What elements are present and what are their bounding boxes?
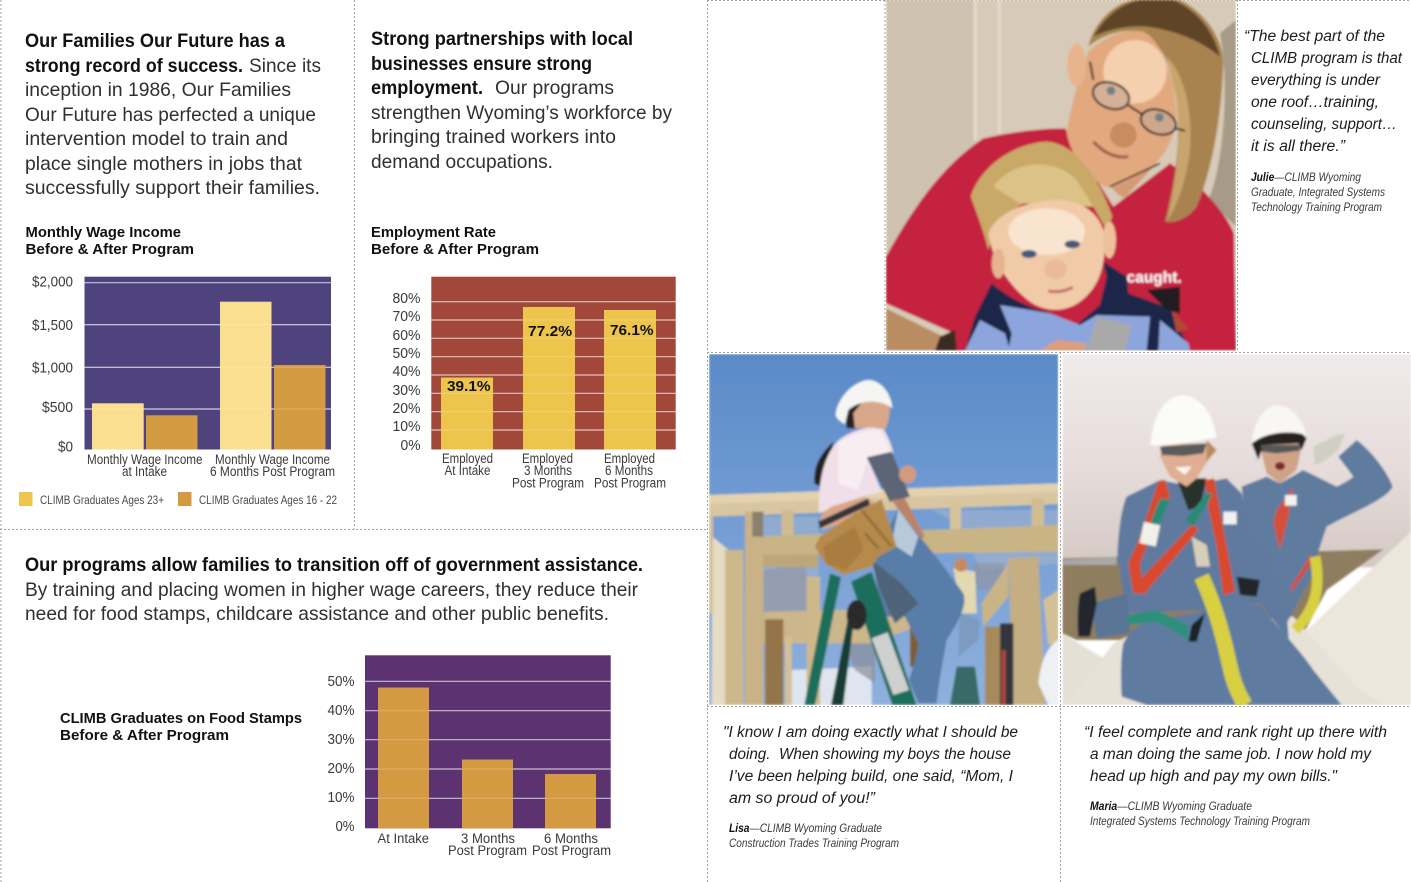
bar chart: employment rate: At Intake xyxy=(444,463,490,478)
quote: Lisa: "I know I am doing exactly what I should be xyxy=(723,724,1018,741)
bar chart: monthly wage income: at Intake xyxy=(122,464,167,479)
bar chart: monthly wage income: Monthly Wage Income xyxy=(215,452,330,467)
bar chart: employment rate: 0% xyxy=(400,438,421,454)
attribution: Julie: Julie—CLIMB Wyoming xyxy=(1251,172,1362,184)
bar chart: employment rate: 10% xyxy=(392,419,421,435)
heading: food stamps chart: Before & After Program xyxy=(60,727,229,744)
bar chart: monthly wage income: 6 Months Post Program xyxy=(210,464,335,479)
bar chart: employment rate: Employed xyxy=(604,451,655,466)
text block: record of success: intervention model to train and xyxy=(25,128,288,150)
bar chart: employment rate: 77.2% xyxy=(528,323,572,340)
photo: Julie and her son xyxy=(886,0,1236,351)
quote: Maria: “I feel complete and rank right up there with xyxy=(1084,724,1387,741)
bar chart: food stamps: 30% xyxy=(328,732,355,748)
bar chart: monthly wage income: $500 xyxy=(42,400,73,416)
heading: food stamps chart: CLIMB Graduates on Food Stamps xyxy=(60,710,302,727)
attribution: Lisa: Construction Trades Training Program xyxy=(729,838,899,850)
attribution: Lisa: Lisa—CLIMB Wyoming Graduate xyxy=(729,823,882,835)
bar chart: monthly wage income: $1,500 xyxy=(32,318,73,334)
bar chart: employment rate: 20% xyxy=(392,401,421,417)
quote: Julie: CLIMB program is that xyxy=(1251,50,1403,67)
bar chart: food stamps: 40% xyxy=(328,703,355,719)
bar chart: food stamps: 20% xyxy=(328,761,355,777)
attribution: Maria: Maria—CLIMB Wyoming Graduate xyxy=(1090,801,1252,813)
heading: food stamps chart xyxy=(60,710,302,744)
text block: local partnerships: bringing trained workers into xyxy=(371,126,616,148)
quote: Julie: one roof…training, xyxy=(1251,94,1379,111)
bar chart: employment rate xyxy=(392,277,676,490)
bar chart: employment rate: 30% xyxy=(392,383,421,399)
photo: Julie and her son: caught. xyxy=(1127,270,1182,287)
heading: monthly wage chart xyxy=(26,224,194,258)
quote: Julie: “The best part of the xyxy=(1244,28,1385,45)
text block: record of success: successfully support their families. xyxy=(25,177,320,199)
bar chart: food stamps: 10% xyxy=(328,790,355,806)
bar chart: food stamps: At Intake xyxy=(378,831,429,846)
text block: government assistance: By training and placing women in higher wage careers, they reduce their xyxy=(25,579,638,601)
bar chart: employment rate: Post Program xyxy=(512,476,584,490)
bar chart: employment rate: 60% xyxy=(392,328,421,344)
bar chart: employment rate: Employed xyxy=(442,451,493,466)
attribution: Julie xyxy=(1251,172,1385,214)
quote: Julie: counseling, support… xyxy=(1251,116,1397,133)
bar chart: employment rate: 39.1% xyxy=(447,378,490,395)
text block: record of success: Our Future has perfected a unique xyxy=(25,104,316,126)
heading: employment rate chart xyxy=(371,224,539,258)
bar chart: food stamps: 0% xyxy=(336,819,355,835)
attribution: Maria: Integrated Systems Technology Training Program xyxy=(1090,816,1310,828)
bar chart: monthly wage income xyxy=(32,274,335,479)
heading: employment rate chart: Employment Rate xyxy=(371,224,496,241)
quote: Lisa xyxy=(723,724,1018,850)
bar chart: employment rate: 3 Months xyxy=(524,463,572,478)
quote: Maria: head up high and pay my own bills." xyxy=(1090,768,1338,785)
quote: Lisa: am so proud of you!” xyxy=(729,790,876,807)
quote: Julie xyxy=(1244,28,1403,214)
text block: local partnerships: employment. xyxy=(371,78,483,99)
text block: record of success: Since its xyxy=(249,55,321,77)
bar chart: employment rate: 80% xyxy=(392,291,421,307)
bar chart: employment rate: 76.1% xyxy=(610,322,654,339)
bar chart: food stamps: Post Program xyxy=(532,843,611,858)
bar chart: employment rate: Post Program xyxy=(594,476,666,490)
text block: record of success: inception in 1986, Our Families xyxy=(25,79,291,101)
text block: local partnerships: Strong partnerships with local xyxy=(371,29,633,50)
text block: local partnerships: businesses ensure strong xyxy=(371,54,592,75)
heading: employment rate chart: Before & After Program xyxy=(371,241,539,258)
text block: local partnerships: Our programs xyxy=(495,77,614,99)
quote: Julie: it is all there.” xyxy=(1251,138,1346,155)
bar chart: food stamps: 50% xyxy=(328,674,355,690)
bar chart: employment rate: 70% xyxy=(392,309,421,325)
attribution: Julie: Graduate, Integrated Systems xyxy=(1251,187,1385,199)
quote: Lisa: doing. When showing my boys the house xyxy=(729,746,1011,763)
bar chart: food stamps: 3 Months xyxy=(461,831,515,846)
quote: Lisa: I’ve been helping build, one said, “Mom, I xyxy=(729,768,1014,785)
quote: Maria: a man doing the same job. I now hold my xyxy=(1090,746,1372,763)
legend: age groups: CLIMB Graduates Ages 16 - 22 xyxy=(199,495,337,507)
text block: record of success: Our Families Our Future has a xyxy=(25,31,285,52)
bar chart: employment rate: 6 Months xyxy=(605,463,653,478)
bar chart: monthly wage income: $1,000 xyxy=(32,360,73,376)
text block: government assistance: need for food stamps, childcare assistance and other public benefits. xyxy=(25,603,609,625)
photo: Lisa on ladder xyxy=(709,354,1058,705)
photo: Maria and coworker xyxy=(1062,354,1411,705)
text block: government assistance xyxy=(25,555,643,625)
quote: Maria xyxy=(1084,724,1387,828)
bar chart: monthly wage income: Monthly Wage Income xyxy=(87,452,202,467)
attribution: Lisa xyxy=(729,823,899,850)
bar chart: monthly wage income: $0 xyxy=(58,440,73,456)
attribution: Maria xyxy=(1090,801,1310,828)
bar chart: employment rate: 40% xyxy=(392,364,421,380)
text block: record of success: place single mothers in jobs that xyxy=(25,153,303,175)
heading: monthly wage chart: Before & After Program xyxy=(26,241,194,258)
text block: local partnerships: demand occupations. xyxy=(371,151,553,173)
bar chart: monthly wage income: $2,000 xyxy=(32,274,73,290)
text block: government assistance: Our programs allow families to transition off of government assistance. xyxy=(25,555,643,576)
legend: age groups xyxy=(19,492,337,507)
quote: Julie: everything is under xyxy=(1251,72,1381,89)
bar chart: employment rate: 50% xyxy=(392,346,421,362)
bar chart: food stamps xyxy=(328,655,611,858)
legend: age groups: CLIMB Graduates Ages 23+ xyxy=(40,495,164,507)
text block: record of success: strong record of success. xyxy=(25,56,243,77)
text block: record of success xyxy=(25,31,321,199)
attribution: Julie: Technology Training Program xyxy=(1251,202,1382,214)
bar chart: food stamps: Post Program xyxy=(448,843,527,858)
heading: monthly wage chart: Monthly Wage Income xyxy=(26,224,181,241)
bar chart: food stamps: 6 Months xyxy=(544,831,598,846)
bar chart: employment rate: Employed xyxy=(522,451,573,466)
text block: local partnerships xyxy=(371,29,672,173)
text block: local partnerships: strengthen Wyoming’s workforce by xyxy=(371,102,672,124)
